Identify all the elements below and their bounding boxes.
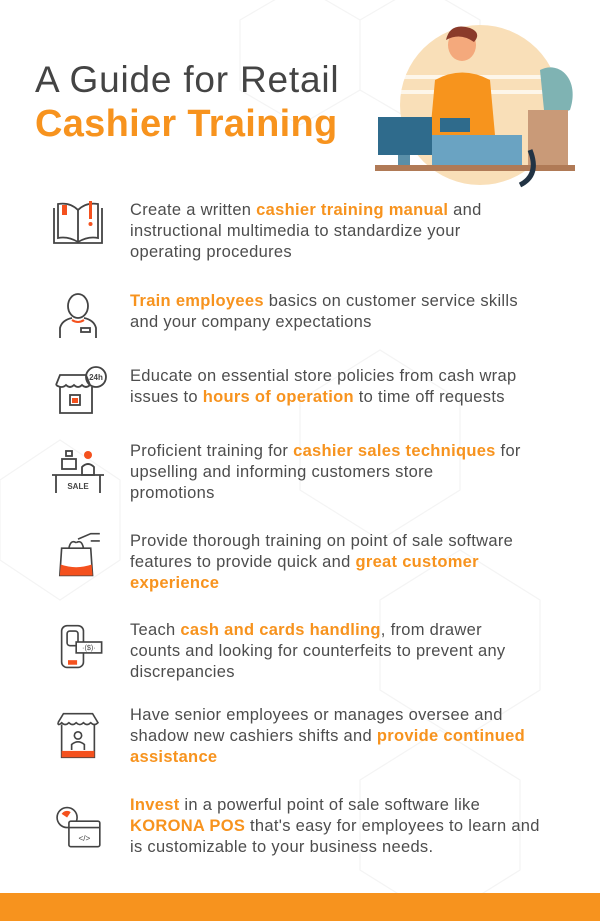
text 6: Teach cash and cards handling, from drawer <box>130 621 482 639</box>
text 8: Invest in a powerful point of sale software like <box>130 796 480 814</box>
text 6: discrepancies <box>130 663 235 681</box>
title: Cashier Training <box>35 103 338 145</box>
item 7 <box>57 706 525 766</box>
text 6: counts and looking for counterfeits to prevent any <box>130 642 505 660</box>
text 3: Educate on essential store policies from cash wrap <box>130 367 516 385</box>
icon: shopping bag <box>58 532 100 576</box>
text 8: KORONA POS that's easy for employees to learn and <box>130 817 540 835</box>
title <box>35 59 339 145</box>
text 2 <box>130 292 518 331</box>
icon: store 24h <box>55 366 107 414</box>
item 2 <box>59 292 518 338</box>
text 4 <box>130 442 521 502</box>
icon: gear code: </> <box>78 834 90 843</box>
icon: manual book <box>53 201 103 244</box>
text 7: assistance <box>130 748 217 766</box>
text 4: promotions <box>130 484 215 502</box>
icon: kiosk with person <box>57 712 99 758</box>
text 1: Create a written cashier training manual and <box>130 201 482 219</box>
item 3 <box>55 366 516 414</box>
illustration: cashier at counter <box>375 25 575 188</box>
item 6 <box>60 621 506 681</box>
text 7: shadow new cashiers shifts and provide continued <box>130 727 525 745</box>
text 1: operating procedures <box>130 243 292 261</box>
text 5: experience <box>130 574 219 592</box>
title: A Guide for Retail <box>35 59 339 100</box>
text 5 <box>130 532 513 592</box>
text 3 <box>130 367 516 406</box>
item 5 <box>58 532 513 592</box>
text 5: Provide thorough training on point of sale software <box>130 532 513 550</box>
text 2: Train employees basics on customer service skills <box>130 292 518 310</box>
icon: card terminal cash: ·($)· <box>82 643 96 652</box>
text 4: upselling and informing customers store <box>130 463 433 481</box>
item 8 <box>56 796 540 856</box>
footer bar <box>0 893 600 921</box>
item 4 <box>52 442 521 502</box>
text 7: Have senior employees or manages oversee and <box>130 706 503 724</box>
text 6 <box>130 621 506 681</box>
text 7 <box>130 706 525 766</box>
icon: store 24h: 24h <box>89 373 103 382</box>
icon: sale counter: SALE <box>67 482 89 491</box>
icon: sale counter <box>52 450 104 493</box>
icon: gear code <box>56 806 101 848</box>
text 8 <box>130 796 540 856</box>
item 1 <box>53 201 482 261</box>
text 1: instructional multimedia to standardize your <box>130 222 461 240</box>
icon: employee <box>59 293 97 338</box>
text 1 <box>130 201 482 261</box>
text 2: and your company expectations <box>130 313 372 331</box>
text 8: is customizable to your business needs. <box>130 838 433 856</box>
text 4: Proficient training for cashier sales techniques for <box>130 442 521 460</box>
text 3: issues to hours of operation to time off requests <box>130 388 505 406</box>
text 5: features to provide quick and great customer <box>130 553 479 571</box>
icon: card terminal cash <box>60 624 102 668</box>
